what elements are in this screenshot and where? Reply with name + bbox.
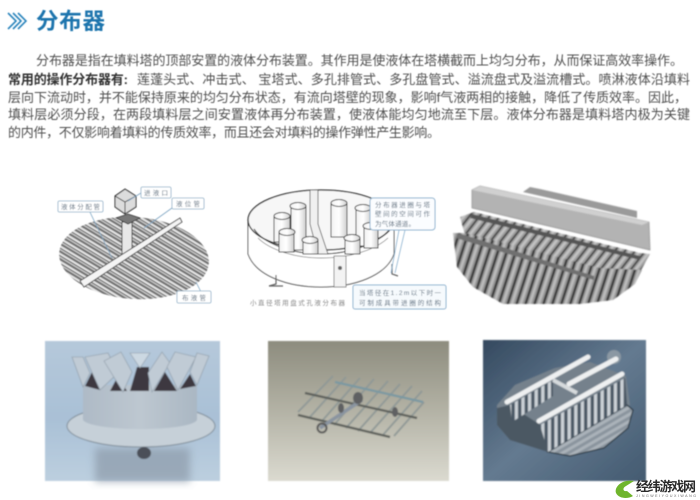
connector xyxy=(553,380,577,393)
crown teeth xyxy=(72,352,209,392)
photo: grid pipe distributor xyxy=(268,341,449,481)
inlet box xyxy=(115,189,136,214)
leader lines xyxy=(88,193,204,298)
text block: description: 常用的操作分布器有: xyxy=(8,72,128,87)
photo: grey trough distributor xyxy=(453,186,650,304)
finned body lower band xyxy=(453,233,642,304)
label: 液位管 xyxy=(172,198,204,209)
base flange xyxy=(67,405,215,447)
centre strips xyxy=(310,190,328,254)
main pipe and hub xyxy=(320,400,362,428)
rear teeth xyxy=(523,187,637,218)
riser cylinders xyxy=(274,200,379,254)
title: 分布器 xyxy=(36,9,105,34)
callout: diameter note xyxy=(353,285,446,309)
callout: annulus: 为气体通道。 xyxy=(375,219,415,228)
body xyxy=(83,385,197,429)
text block: description: 莲蓬头式、冲击式、 宝塔式、多孔排管式、多孔盘管式、溢流盘式及溢流槽式。喷淋液体沿填料 xyxy=(137,72,690,87)
shadow xyxy=(95,448,190,482)
thin cross tubes xyxy=(298,376,424,436)
main header bar xyxy=(80,218,182,287)
text block: description: 的内件，不仅影响着填料的传质效率，而且还会对填料的操作弹性产生影响。 xyxy=(8,125,440,140)
flange xyxy=(607,350,621,364)
watermark subtitle: JINGWEIYOUXIWANG xyxy=(636,494,696,498)
text block: description: 层向下流动时，并不能保持原来的均匀分布状态，有流向塔壁的现象，影响f气液两相的接触，降低了传质效率。因此， xyxy=(8,90,687,105)
cross bars xyxy=(456,233,594,280)
text block: description xyxy=(8,53,690,140)
text block: description: 分布器是指在填料塔的顶部安置的液体分布装置。其作用是使液体在塔横截而上均匀分布，从而保证高效率操作。 xyxy=(36,53,683,68)
callout: annulus xyxy=(370,198,435,273)
header rails xyxy=(298,382,423,437)
label: 液位管: 液位管 xyxy=(176,199,200,208)
dark interior xyxy=(85,367,196,391)
label: 进液口: 进液口 xyxy=(144,188,168,197)
diagram: plate-type distributor xyxy=(248,190,446,309)
left dark block xyxy=(497,405,548,452)
heading xyxy=(8,9,105,34)
callout: diameter note: 当塔径在1.2m以下时一 xyxy=(359,288,442,297)
photo: CAD trough distributor xyxy=(483,340,646,481)
callout: annulus: 分布器进圈与塔 xyxy=(375,200,430,209)
text block: description: 填料层必须分段，在两段填料层之间安置液体再分布装置，使液体能均匀地流至下层。液体分布器是填料塔内极为关键 xyxy=(8,107,690,122)
feet xyxy=(269,264,398,286)
ring wall xyxy=(248,220,394,287)
bolt xyxy=(137,447,151,459)
lower ribbed plate xyxy=(548,405,633,456)
trough xyxy=(472,186,650,250)
watermark text: 经纬游戏网 xyxy=(636,479,696,494)
finned body upper band xyxy=(460,212,650,272)
bars under rear pipe xyxy=(510,380,553,422)
label: 液体分配管: 液体分配管 xyxy=(61,202,100,211)
callout: annulus: 壁间的空间可作 xyxy=(375,209,430,218)
watermark xyxy=(616,479,696,498)
callout: diameter note: 可制成具带进圈的结构 xyxy=(359,298,442,307)
back serrated plate xyxy=(497,362,630,455)
riser pipe xyxy=(122,222,132,254)
label: 进液口 xyxy=(141,187,171,198)
label: 液体分配管 xyxy=(58,201,103,212)
rim and floor xyxy=(248,190,394,250)
icon: double chevrons xyxy=(8,13,26,29)
caption: 小直径塔用盘式孔液分布器 xyxy=(250,298,346,307)
label: 布液管 xyxy=(177,291,211,303)
photo: crown distributor xyxy=(45,341,220,482)
tube grid xyxy=(56,212,212,304)
label: 布液管: 布液管 xyxy=(182,293,206,302)
diagram: tube-type distributor xyxy=(56,187,212,304)
icon: green logo xyxy=(616,481,634,498)
bars under front pipe xyxy=(540,378,627,452)
top pipes xyxy=(507,357,622,421)
